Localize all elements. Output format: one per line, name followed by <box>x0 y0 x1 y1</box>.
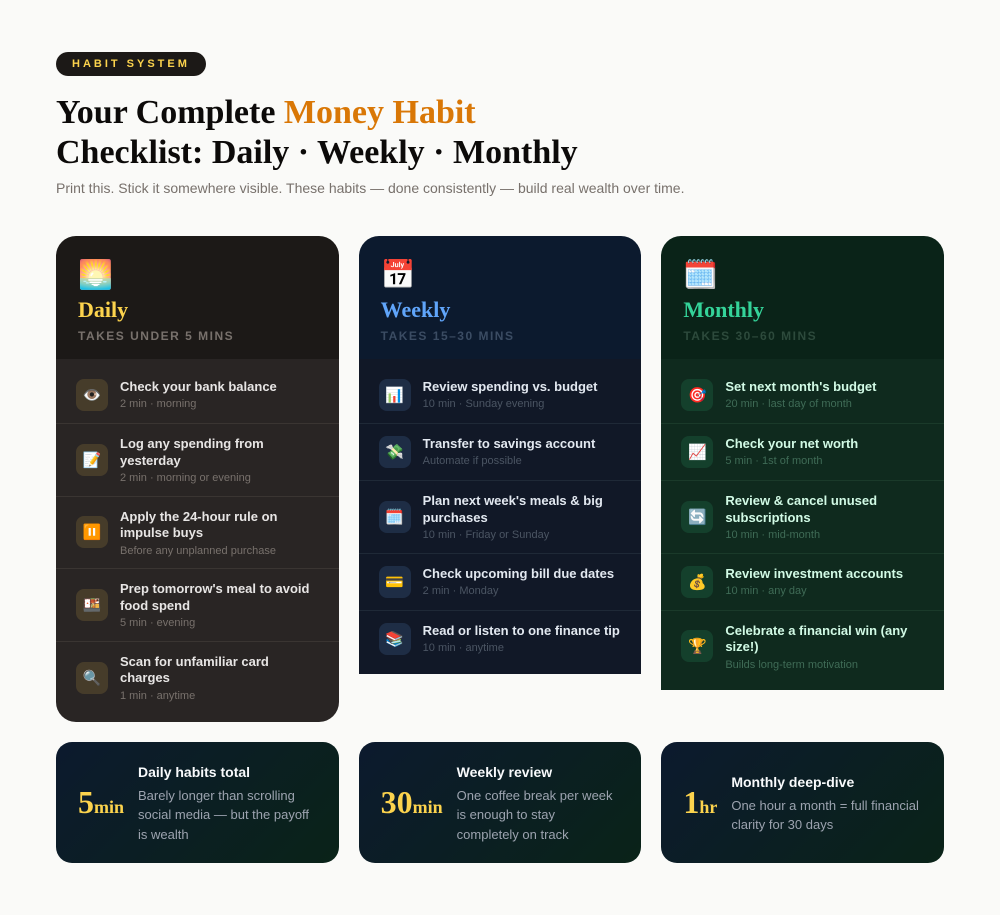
monthly header: TAKES 30–60 MINS <box>683 329 817 343</box>
habit: transfer savings <box>359 424 641 481</box>
stat: weekly review <box>359 742 641 863</box>
habit: subscriptions: 10 min · mid-month <box>725 529 820 541</box>
habit: bank balance: Check your bank balance <box>120 379 277 394</box>
habit: bank balance <box>56 367 339 424</box>
habit: log spending: 📝 <box>83 452 101 469</box>
stat: monthly deep-dive: 1hr <box>683 784 717 820</box>
habit: card charges <box>76 654 269 702</box>
daily header <box>56 236 339 359</box>
habit: next month budget: 🎯 <box>688 387 707 404</box>
habit: finance tip <box>379 623 620 655</box>
habit: 24-hour rule: Apply the 24-hour rule on impulse buys <box>120 509 277 540</box>
stat: daily total <box>56 742 339 863</box>
habit: log spending: 2 min · morning or evening <box>120 472 251 484</box>
habit: investments <box>661 554 944 611</box>
habit: plan meals <box>359 481 641 554</box>
habit: spending vs budget <box>359 367 641 424</box>
title: Your Complete Money Habit <box>56 94 476 131</box>
stat: weekly review: Weekly review <box>457 764 552 780</box>
habit: plan meals: 10 min · Friday or Sunday <box>423 529 549 541</box>
habit: meal prep <box>56 569 339 642</box>
weekly header: 📅 <box>381 259 416 290</box>
stat: monthly deep-dive <box>661 742 944 863</box>
habit: bill due dates: 💳 <box>385 574 404 591</box>
habit: meal prep: 5 min · evening <box>120 617 195 629</box>
weekly header: Weekly <box>381 297 450 322</box>
habit: finance tip: 10 min · anytime <box>423 642 504 654</box>
habit: next month budget: Set next month's budget <box>725 379 876 394</box>
daily header: 🌅 <box>78 259 113 290</box>
habit: finance tip: 📚 <box>385 631 404 648</box>
habit: transfer savings: 💸 <box>385 444 404 461</box>
daily header: Daily <box>78 297 128 322</box>
stat: daily total: Daily habits total <box>138 764 250 780</box>
habit: subscriptions <box>661 481 944 554</box>
habit: celebrate: 🏆 <box>688 638 707 655</box>
habit: celebrate <box>681 623 908 670</box>
habit: investments: 10 min · any day <box>725 585 807 597</box>
habit: bank balance: 2 min · morning <box>120 398 196 410</box>
habit: net worth: Check your net worth <box>725 436 858 451</box>
habit: transfer savings: Transfer to savings account <box>423 436 595 451</box>
habit: spending vs budget: 10 min · Sunday evening <box>423 398 544 410</box>
habit: bill due dates <box>359 554 641 611</box>
habit: bill due dates: 2 min · Monday <box>423 585 498 597</box>
habit: bank balance: 👁️ <box>83 387 101 404</box>
habit: bill due dates: Check upcoming bill due dates <box>423 566 614 581</box>
habit: log spending <box>56 424 339 497</box>
badge <box>56 52 206 76</box>
habit: next month budget <box>661 367 944 424</box>
habit: net worth: 5 min · 1st of month <box>725 455 823 467</box>
weekly header <box>359 236 641 359</box>
weekly header: TAKES 15–30 MINS <box>381 329 514 343</box>
weekly habit list <box>359 359 641 674</box>
checklist columns <box>56 236 944 722</box>
stat: monthly deep-dive: One hour a month = full financial clarity for 30 days <box>731 798 919 832</box>
habit: finance tip: Read or listen to one finance tip <box>423 623 620 638</box>
habit: celebrate: Builds long-term motivation <box>725 658 858 670</box>
habit: 24-hour rule: ⏸️ <box>83 524 101 541</box>
monthly habit list <box>661 359 944 690</box>
habit: investments: 💰 <box>688 574 707 591</box>
habit: subscriptions: Review & cancel unused subscriptions <box>725 493 877 524</box>
habit: card charges: 🔍 <box>83 670 101 687</box>
subtitle: Print this. Stick it somewhere visible. These habits — done consistently — build real wealth over time. <box>56 180 684 196</box>
stat: weekly review: One coffee break per week is enough to stay completely on track <box>457 788 613 842</box>
habit: subscriptions: 🔄 <box>688 509 707 526</box>
badge: HABIT SYSTEM <box>72 58 190 70</box>
habit: transfer savings: Automate if possible <box>423 455 522 467</box>
habit: spending vs budget: Review spending vs. budget <box>423 379 597 394</box>
panel: monthly <box>661 236 944 690</box>
daily header: TAKES UNDER 5 MINS <box>78 329 234 343</box>
summary stats <box>56 742 944 863</box>
habit: meal prep: 🍱 <box>83 597 101 614</box>
panel: weekly <box>359 236 641 674</box>
monthly header <box>661 236 944 359</box>
habit: 24-hour rule: Before any unplanned purchase <box>120 544 276 556</box>
stat: daily total: Barely longer than scrolling social media — but the payoff is wealth <box>138 788 309 842</box>
habit: 24-hour rule <box>56 497 339 569</box>
habit: net worth <box>661 424 944 481</box>
stat: monthly deep-dive: Monthly deep-dive <box>731 774 854 790</box>
habit: card charges: 1 min · anytime <box>120 690 195 702</box>
stat: daily total: 5min <box>78 784 124 820</box>
monthly header: Monthly <box>683 297 764 322</box>
panel: daily <box>56 236 339 722</box>
stat: weekly review: 30min <box>381 784 443 820</box>
title: Checklist: Daily · Weekly · Monthly <box>56 134 578 171</box>
habit: card charges: Scan for unfamiliar card charges <box>120 654 269 685</box>
habit: net worth: 📈 <box>688 444 707 461</box>
title <box>56 94 578 171</box>
habit: plan meals: 🗓️ <box>385 509 404 526</box>
habit: next month budget: 20 min · last day of month <box>725 398 852 410</box>
habit: celebrate: Celebrate a financial win (any size!) <box>725 623 907 654</box>
habit: log spending: Log any spending from yesterday <box>120 436 264 468</box>
habit: meal prep: Prep tomorrow's meal to avoid food spend <box>120 581 309 613</box>
habit: plan meals: Plan next week's meals & big purchases <box>423 493 603 524</box>
habit: investments: Review investment accounts <box>725 566 903 581</box>
monthly header: 🗓️ <box>683 259 718 290</box>
habit: spending vs budget: 📊 <box>385 387 404 404</box>
daily habit list <box>56 359 339 722</box>
